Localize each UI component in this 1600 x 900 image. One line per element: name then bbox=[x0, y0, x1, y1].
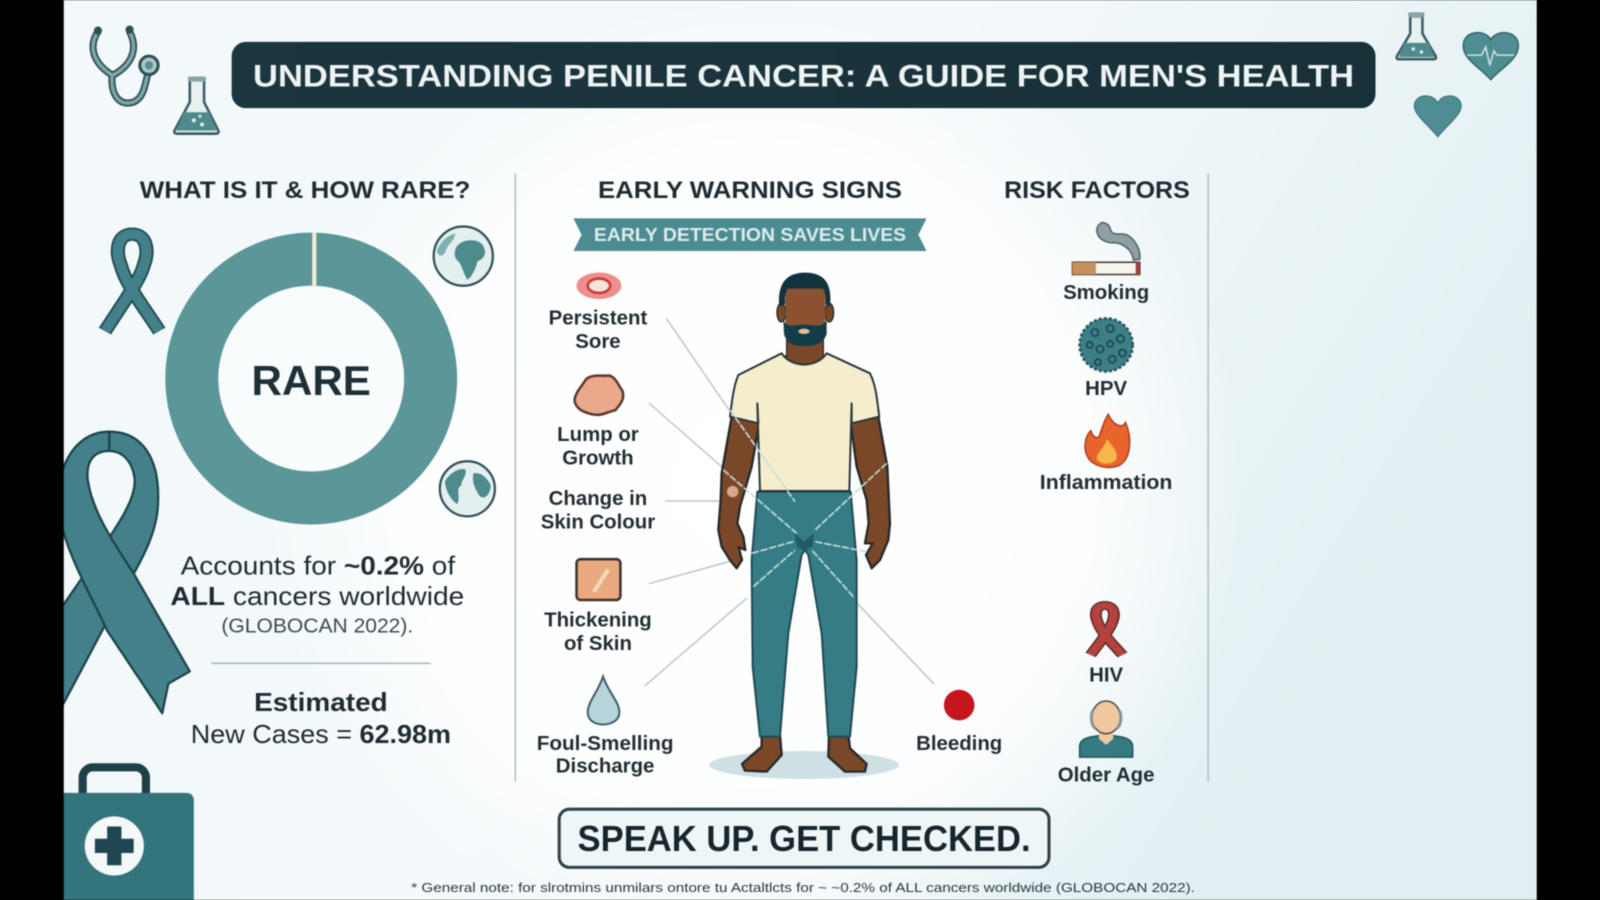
sign: persistent sore: Persistent bbox=[549, 307, 647, 329]
dividers bbox=[515, 173, 1208, 782]
sign: lump or growth bbox=[557, 376, 639, 469]
figure: man bbox=[709, 273, 899, 779]
sign: thickening of skin: Thickening bbox=[544, 610, 652, 632]
heading: what is it: WHAT IS IT & HOW RARE? bbox=[140, 177, 470, 204]
sign: discharge bbox=[537, 677, 673, 777]
sign: lump or growth: Lump or bbox=[557, 424, 639, 446]
heading: risk factors: RISK FACTORS bbox=[1004, 177, 1190, 204]
footnote: * General note: for slrotmins unmilars ontore tu Actaltlcts for ~ ~0.2% of ALL cancers worldwide (GLOBOCAN 2022). bbox=[411, 880, 1195, 895]
text: share of cancers: (GLOBOCAN 2022). bbox=[221, 616, 413, 638]
call to action: SPEAK UP. GET CHECKED. bbox=[578, 819, 1031, 859]
sign: discharge: Discharge bbox=[556, 755, 654, 777]
icon: flask left bbox=[174, 77, 219, 134]
heading: early warning signs: EARLY WARNING SIGNS bbox=[598, 177, 902, 204]
shirt bbox=[730, 353, 879, 491]
feet bbox=[742, 735, 782, 772]
leader lines bbox=[645, 318, 934, 686]
risk: older age bbox=[1058, 701, 1154, 787]
panel: early warning signs bbox=[537, 177, 1002, 779]
icon: first aid kit bbox=[41, 767, 194, 900]
markers on body bbox=[723, 410, 887, 597]
sign: thickening of skin bbox=[544, 559, 652, 655]
sign: change in skin colour: Skin Colour bbox=[541, 512, 655, 534]
sign: thickening of skin: of Skin bbox=[564, 633, 632, 655]
banner: early detection saves lives: EARLY DETECTION SAVES LIVES bbox=[594, 224, 906, 245]
text: estimated new cases: Estimated bbox=[254, 689, 388, 717]
sign: change in skin colour: Change in bbox=[549, 488, 647, 510]
panel: what is it and how rare bbox=[105, 177, 495, 749]
skin patch bbox=[727, 486, 738, 497]
neck and head bbox=[782, 340, 827, 366]
text: share of cancers: ALL cancers worldwide bbox=[170, 583, 464, 611]
text: share of cancers: Accounts for ~0.2% of bbox=[181, 552, 456, 580]
risk: inflammation bbox=[1040, 414, 1172, 494]
risk: smoking: Smoking bbox=[1063, 282, 1149, 304]
sign: discharge: Foul-Smelling bbox=[537, 733, 673, 755]
icon: globe top bbox=[434, 227, 493, 286]
chart: rare donut: RARE bbox=[252, 357, 371, 404]
icon: heart bbox=[1414, 96, 1461, 137]
banner: early detection saves lives bbox=[573, 218, 927, 251]
risk: older age: Older Age bbox=[1058, 765, 1154, 787]
risk: inflammation: Inflammation bbox=[1040, 472, 1172, 494]
trousers bbox=[752, 492, 857, 737]
risk: smoking bbox=[1063, 222, 1149, 304]
icon: small awareness ribbon bbox=[105, 234, 159, 331]
arms bbox=[718, 417, 759, 568]
text: estimated new cases bbox=[191, 689, 451, 749]
chart: rare donut bbox=[192, 233, 431, 498]
text: share of cancers bbox=[170, 552, 464, 638]
icon: globe bottom bbox=[440, 461, 495, 516]
risk: hpv: HPV bbox=[1085, 378, 1127, 400]
sign: persistent sore: Sore bbox=[575, 331, 621, 353]
call to action bbox=[559, 809, 1049, 867]
sign: lump or growth: Growth bbox=[562, 447, 634, 469]
text: estimated new cases: New Cases = 62.98m bbox=[191, 721, 451, 749]
icon: flask right bbox=[1397, 12, 1436, 59]
panel: risk factors bbox=[1004, 177, 1190, 787]
risk: hpv bbox=[1080, 318, 1133, 400]
sign: bleeding bbox=[916, 690, 1002, 755]
icon: stethoscope bbox=[93, 26, 158, 103]
sign: change in skin colour bbox=[541, 488, 655, 534]
risk: hiv bbox=[1089, 606, 1124, 687]
sign: bleeding: Bleeding bbox=[916, 733, 1002, 755]
sign: persistent sore bbox=[549, 272, 647, 353]
risk: hiv: HIV bbox=[1089, 665, 1124, 687]
title banner: UNDERSTANDING PENILE CANCER: A GUIDE FOR MEN'S HEALTH bbox=[253, 58, 1354, 94]
title banner bbox=[232, 42, 1376, 108]
icon: large awareness ribbon bbox=[41, 432, 190, 714]
icon: heart with pulse bbox=[1463, 33, 1518, 80]
